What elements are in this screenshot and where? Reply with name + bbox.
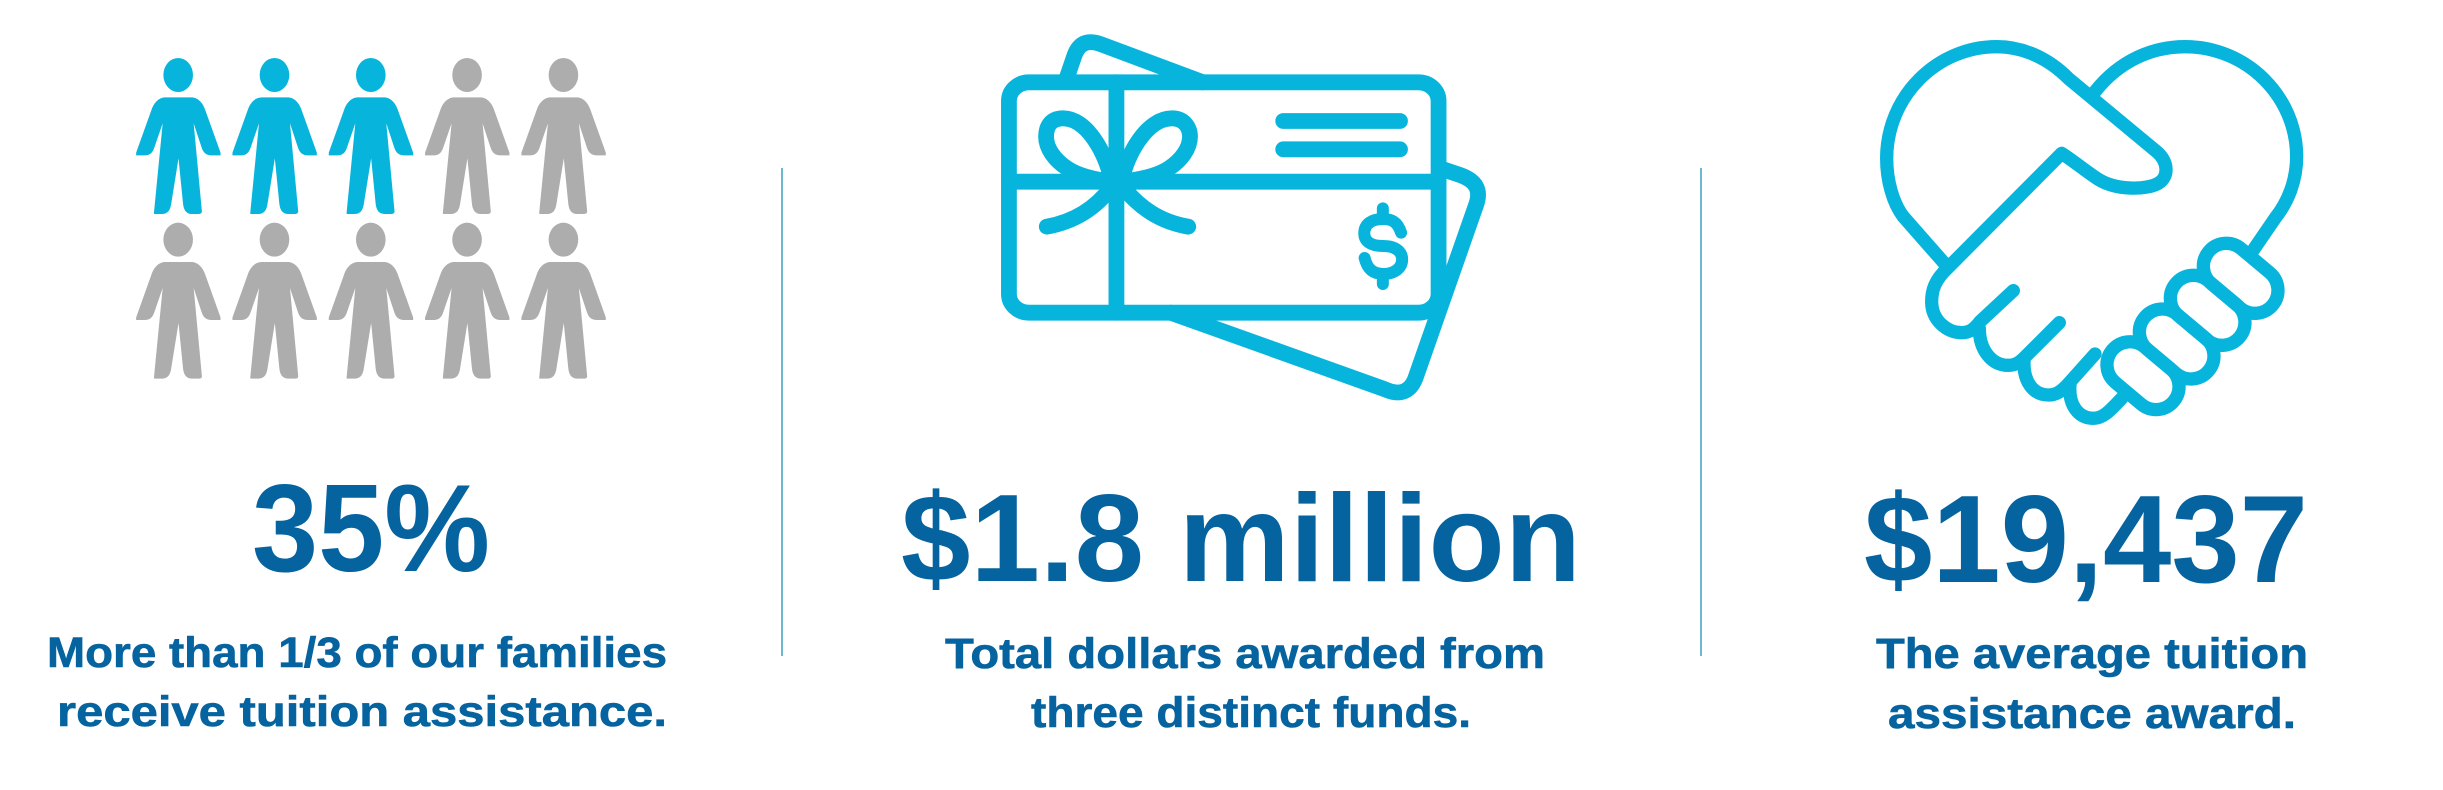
icon: heart handshake <box>1887 47 2297 419</box>
front card <box>1009 82 1439 313</box>
statistic: $19,437: $19,437 <box>1864 471 2308 609</box>
panel: families receiving assistance <box>47 58 667 736</box>
panel: total dollars awarded <box>901 42 1581 737</box>
icon: people grid, 3 of 10 highlighted <box>136 58 606 379</box>
description: families <box>47 629 667 736</box>
description: dollars: Total dollars awarded from <box>945 630 1545 678</box>
grey people <box>136 58 606 379</box>
description: families: receive tuition assistance. <box>57 688 667 736</box>
bow <box>1046 118 1112 182</box>
description: average award: assistance award. <box>1888 690 2296 738</box>
fingers right hand <box>2194 234 2287 323</box>
highlighted people <box>136 58 413 214</box>
right heart lobe <box>2095 47 2297 250</box>
fingers left hand <box>1979 323 2059 365</box>
panel: average award <box>1864 47 2308 738</box>
statistic: 35%: 35% <box>252 460 490 598</box>
description: average award <box>1876 630 2308 738</box>
ribbon <box>1009 82 1439 313</box>
description: dollars <box>945 630 1545 737</box>
text lines <box>1283 121 1400 149</box>
back card <box>1066 42 1203 82</box>
description: dollars: three distinct funds. <box>1031 689 1471 737</box>
left hand and heart lobe <box>1887 47 2166 333</box>
statistic: $1.8 million: $1.8 million <box>901 470 1581 608</box>
dollar sign <box>1364 208 1402 284</box>
description: average award: The average tuition <box>1876 630 2308 678</box>
icon: gift cards <box>1009 42 1478 392</box>
description: families: More than 1/3 of our families <box>47 629 667 677</box>
